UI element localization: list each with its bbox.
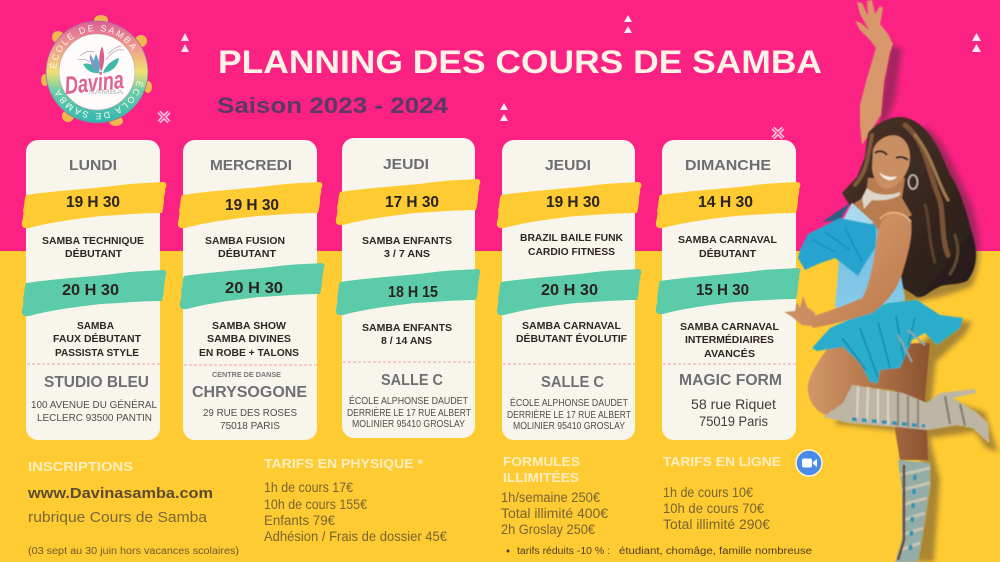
panel: Dimanche bbox=[656, 140, 800, 440]
panel: Dimanche: MAGIC FORM bbox=[679, 372, 782, 389]
section: formules illimitées: ILLIMITÉES bbox=[503, 470, 579, 485]
section: tarifs en ligne bbox=[663, 454, 781, 532]
section: formules illimitées: Total illimité 400€ bbox=[501, 506, 608, 521]
panel: Dimanche: 15 H 30 bbox=[696, 282, 749, 299]
section: formules illimitées: 2h Groslay 250€ bbox=[501, 522, 595, 537]
panel: Jeudi adultes: BRAZIL BAILE FUNK bbox=[520, 232, 623, 244]
panel: Mercredi: 19 H 30 bbox=[225, 197, 279, 214]
fringe top bbox=[798, 218, 876, 276]
panel: Jeudi adultes: CARDIO FITNESS bbox=[528, 246, 615, 258]
decor: cross above Dimanche bbox=[773, 128, 783, 138]
panel: Jeudi adultes bbox=[497, 140, 641, 440]
panel: Jeudi adultes: 20 H 30 bbox=[541, 282, 598, 299]
panel: Dimanche: AVANCÉS bbox=[704, 347, 755, 360]
note: reduced rates: tarifs réduits -10 % : bbox=[517, 546, 610, 557]
panel: Dimanche: 75019 Paris bbox=[699, 413, 768, 429]
hand bbox=[784, 296, 815, 326]
subtitle: season: Saison 2023 - 2024 bbox=[217, 93, 449, 118]
decor: triangles top right bbox=[972, 33, 981, 52]
panel: Lundi: 100 AVENUE DU GÉNÉRAL bbox=[31, 398, 157, 411]
section: formules illimitées bbox=[501, 454, 608, 537]
section: tarifs en physique: Enfants 79€ bbox=[264, 513, 335, 528]
panel: Jeudi enfants bbox=[336, 138, 480, 438]
decor: cross near logo bbox=[159, 112, 169, 122]
dancer illustration bbox=[784, 0, 998, 562]
logo: Davina Samba tambourine bbox=[41, 15, 152, 126]
raised arm bbox=[855, 0, 893, 145]
icon: video camera bbox=[796, 450, 822, 476]
panel: Jeudi enfants: ÉCOLE ALPHONSE DAUDET bbox=[349, 396, 468, 407]
panel: Mercredi: EN ROBE + TALONS bbox=[199, 347, 299, 359]
section: inscriptions bbox=[27, 459, 239, 557]
panel: Dimanche: 14 H 30 bbox=[698, 194, 753, 211]
panel: Dimanche: INTERMÉDIAIRES bbox=[685, 333, 774, 346]
background: pink upper band bbox=[0, 0, 1000, 251]
panel: Mercredi: 75018 PARIS bbox=[220, 420, 280, 432]
torso bbox=[835, 225, 905, 322]
title: PLANNING DES COURS DE SAMBA bbox=[218, 44, 822, 80]
necklace bbox=[862, 188, 900, 209]
panel: Dimanche: SAMBA CARNAVAL bbox=[680, 321, 780, 333]
panel: Jeudi adultes: MOLINIER 95410 GROSLAY bbox=[513, 421, 625, 432]
panel: Jeudi adultes: 19 H 30 bbox=[546, 194, 600, 211]
panel: Lundi: 20 H 30 bbox=[62, 282, 119, 299]
section: tarifs en physique: 1h de cours 17€ bbox=[264, 480, 353, 495]
section: inscriptions: (03 sept au 30 juin hors vacances scolaires) bbox=[28, 546, 239, 557]
panel: Jeudi enfants: 8 / 14 ANS bbox=[381, 335, 432, 347]
standing boot bbox=[895, 460, 930, 562]
raised thigh and standing leg bbox=[808, 343, 930, 460]
crossing arm bbox=[806, 212, 911, 328]
panel: Jeudi adultes: JEUDI bbox=[545, 157, 591, 174]
panel: Jeudi enfants: DERRIÈRE LE 17 RUE ALBERT bbox=[347, 408, 471, 419]
logo: Davina Samba tambourine: ÉCOLE DE SAMBA bbox=[48, 24, 136, 68]
face bbox=[872, 135, 910, 189]
earring bbox=[908, 175, 918, 189]
panel: Jeudi enfants: JEUDI bbox=[383, 156, 429, 173]
panel: Jeudi adultes: DÉBUTANT ÉVOLUTIF bbox=[516, 332, 628, 345]
panel: Mercredi: SAMBA SHOW bbox=[212, 320, 286, 332]
panel: Mercredi: SAMBA FUSION bbox=[205, 235, 285, 247]
panel: Dimanche: 58 rue Riquet bbox=[691, 396, 776, 412]
panel: Mercredi: 20 H 30 bbox=[225, 280, 283, 297]
panel: Lundi: SAMBA bbox=[77, 320, 114, 332]
section: formules illimitées: 1h/semaine 250€ bbox=[501, 490, 600, 505]
panel: Lundi bbox=[22, 140, 166, 440]
panel: Jeudi enfants: SAMBA ENFANTS bbox=[362, 235, 452, 247]
neck and chest bbox=[850, 178, 912, 232]
panel: Lundi: SAMBA TECHNIQUE bbox=[42, 235, 144, 247]
panel: Jeudi enfants: 3 / 7 ANS bbox=[384, 248, 430, 260]
note: reduced rates bbox=[506, 546, 812, 557]
section: tarifs en physique: 10h de cours 155€ bbox=[264, 497, 367, 512]
panel: Mercredi: SAMBA DIVINES bbox=[207, 333, 291, 345]
panel: Dimanche: SAMBA CARNAVAL bbox=[678, 234, 778, 246]
section: inscriptions: www.Davinasamba.com bbox=[27, 485, 213, 502]
panel: Jeudi adultes: DERRIÈRE LE 17 RUE ALBERT bbox=[507, 410, 631, 421]
section: tarifs en ligne: Total illimité 290€ bbox=[663, 517, 770, 532]
panel: Jeudi enfants: SALLE C bbox=[381, 372, 443, 389]
panel: Lundi: LECLERC 93500 PANTIN bbox=[37, 412, 152, 424]
section: inscriptions: rubrique Cours de Samba bbox=[28, 510, 208, 526]
hair bbox=[842, 117, 976, 297]
panel: Jeudi enfants: MOLINIER 95410 GROSLAY bbox=[352, 419, 465, 430]
logo: Davina Samba tambourine: SAMBA bbox=[88, 89, 124, 96]
panel: Mercredi: MERCREDI bbox=[210, 157, 292, 174]
decor: triangles centre bbox=[500, 103, 508, 121]
skirt bbox=[812, 300, 963, 383]
section: tarifs en ligne: 1h de cours 10€ bbox=[663, 485, 753, 500]
panel: Lundi: DÉBUTANT bbox=[65, 247, 123, 260]
section: formules illimitées: FORMULES bbox=[503, 454, 580, 469]
panel: Dimanche: DÉBUTANT bbox=[699, 247, 757, 260]
panel: Jeudi adultes: SAMBA CARNAVAL bbox=[522, 320, 622, 332]
panel: Lundi: FAUX DÉBUTANT bbox=[53, 332, 142, 345]
panel: Jeudi adultes: SALLE C bbox=[541, 374, 604, 391]
panel: Mercredi bbox=[178, 140, 324, 440]
panel: Mercredi: DÉBUTANT bbox=[218, 247, 277, 260]
section: tarifs en ligne: TARIFS EN LIGNE bbox=[663, 454, 781, 469]
section: tarifs en physique bbox=[264, 456, 447, 544]
note: reduced rates: étudiant, chomâge, famille nombreuse bbox=[619, 546, 812, 557]
decor: triangles near logo bbox=[181, 33, 189, 52]
logo: Davina Samba tambourine: ÉCOLA DE SAMBA bbox=[55, 81, 144, 120]
raised boot bbox=[823, 385, 989, 443]
panel: Lundi: LUNDI bbox=[69, 157, 117, 174]
panel: Dimanche: DIMANCHE bbox=[685, 157, 771, 174]
panel: Lundi: 19 H 30 bbox=[66, 194, 120, 211]
background: yellow lower band bbox=[0, 251, 1000, 562]
panel: Jeudi adultes: ÉCOLE ALPHONSE DAUDET bbox=[510, 398, 628, 409]
panel: Mercredi: 29 RUE DES ROSES bbox=[203, 407, 297, 419]
decor: triangles top centre bbox=[624, 15, 632, 33]
panel: Mercredi: CHRYSOGONE bbox=[192, 384, 307, 401]
panel: Jeudi enfants: SAMBA ENFANTS bbox=[362, 322, 452, 334]
hair highlights bbox=[855, 125, 958, 274]
panel: Lundi: STUDIO BLEU bbox=[44, 374, 149, 391]
panel: Mercredi: CENTRE DE DANSE bbox=[212, 370, 281, 379]
section: tarifs en physique: Adhésion / Frais de dossier 45€ bbox=[264, 529, 447, 544]
panel: Jeudi enfants: 18 H 15 bbox=[388, 284, 438, 301]
section: inscriptions: INSCRIPTIONS bbox=[28, 459, 133, 474]
section: tarifs en physique: TARIFS EN PHYSIQUE * bbox=[264, 456, 424, 471]
panel: Jeudi enfants: 17 H 30 bbox=[385, 194, 439, 211]
section: tarifs en ligne: 10h de cours 70€ bbox=[663, 501, 764, 516]
logo: Davina Samba tambourine: Davina bbox=[63, 66, 125, 100]
panel: Lundi: PASSISTA STYLE bbox=[55, 347, 139, 359]
